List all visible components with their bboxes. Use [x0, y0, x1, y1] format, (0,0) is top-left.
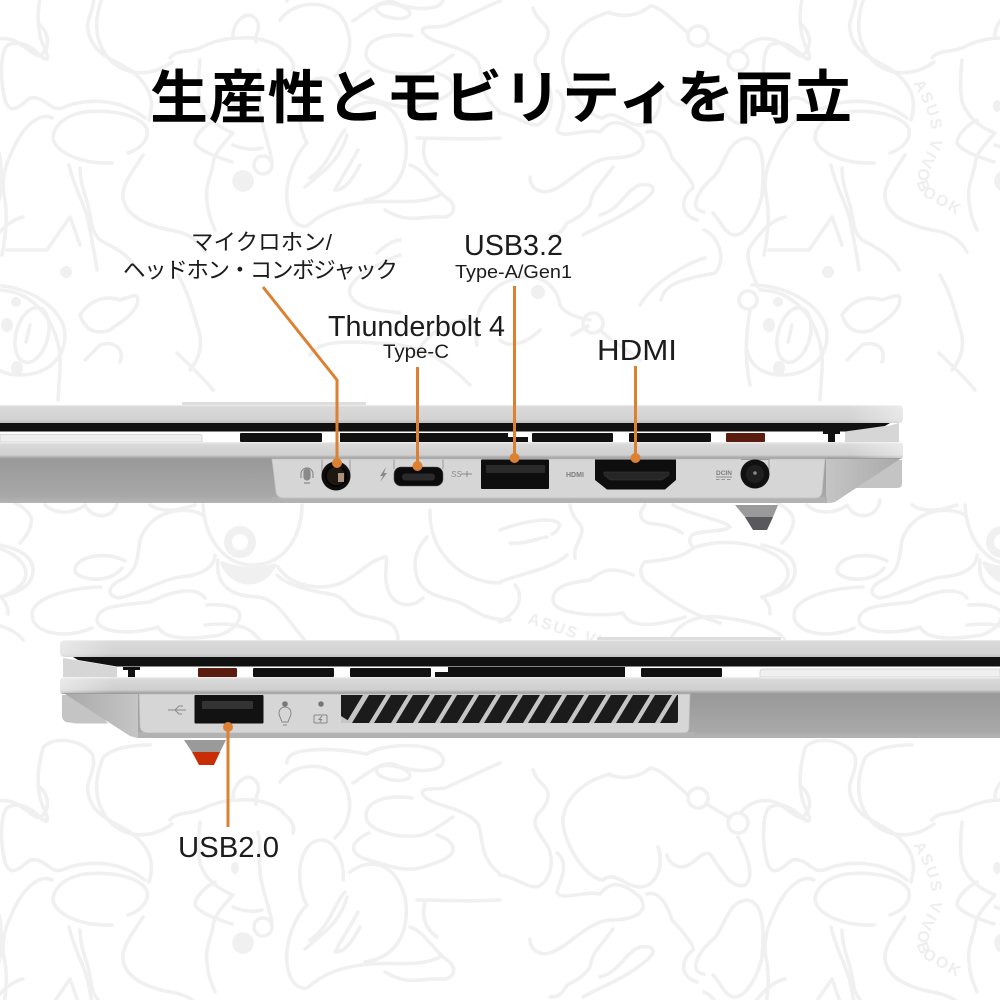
- base top edge: [0, 442, 903, 459]
- side wedge: [65, 694, 140, 738]
- icon: power LED and bulb: [279, 701, 291, 725]
- lid edge tab: [597, 637, 781, 641]
- label: USB3.2: Type-A/Gen1: [455, 261, 572, 282]
- HDMI port: [595, 460, 676, 490]
- keyboard keys in gap: [123, 667, 722, 677]
- port panel: [272, 459, 825, 498]
- lid edge tab: [182, 402, 366, 406]
- icon: SS USB: SS: [451, 470, 462, 479]
- cooling vent: [341, 695, 678, 723]
- label: microphone / headphone combo jack: マイクロホン/: [191, 230, 333, 255]
- label: USB3.2: USB3.2: [464, 230, 563, 262]
- title: 生産性とモビリティを両立: [150, 66, 852, 131]
- rubber foot: [735, 505, 778, 530]
- hinge wedge: [63, 658, 117, 677]
- icon: USB symbol: [168, 706, 186, 714]
- underside grey: [0, 459, 826, 503]
- leader: USB3.2: [510, 286, 520, 463]
- touchpad sliver: [0, 434, 202, 442]
- icon: battery LED: [314, 701, 327, 723]
- underside grey: [138, 694, 1000, 738]
- keyboard gap: [73, 657, 1000, 666]
- laptop: upper view, left-side ports: [0, 402, 903, 530]
- label: USB2.0: USB2.0: [178, 832, 279, 864]
- label: microphone / headphone combo jack: ヘッドホン・コンボジャック: [123, 258, 398, 283]
- USB-C port: [394, 460, 443, 486]
- label: microphone / headphone combo jack: [123, 230, 398, 283]
- leader: HDMI: [630, 366, 640, 463]
- background wordmarks: ASUS VIVOBOOK: ASUS VIVOBOOK: [914, 82, 962, 214]
- rear foot wedge: [62, 695, 108, 724]
- base top edge: [60, 677, 1000, 694]
- lid: [60, 640, 1000, 657]
- combo jack port: [322, 460, 350, 490]
- leader: Thunderbolt 4: [412, 367, 422, 471]
- touchpad sliver: [760, 669, 1000, 677]
- lid: [0, 405, 903, 423]
- hinge wedge: [845, 423, 899, 442]
- background wordmarks: ASUS VIVOBOOK: ASUS VIVOBOOK: [914, 844, 962, 976]
- rear foot wedge: [853, 460, 902, 488]
- icon: thunderbolt: [380, 467, 387, 482]
- rubber foot: [184, 740, 226, 765]
- keyboard keys in gap: [240, 431, 840, 442]
- leader: USB2.0: [223, 722, 233, 827]
- icon: microphone headset: [301, 468, 313, 483]
- DC-IN label: DCIN: [716, 470, 732, 477]
- label: Thunderbolt 4: Thunderbolt 4: [328, 311, 505, 343]
- USB-A 2.0 port: [194, 695, 264, 724]
- background wordmarks: ASUS VIVOBOOK: ASUS VIVO: [526, 611, 631, 659]
- label: Thunderbolt 4: Type-C: [383, 342, 449, 363]
- port panel: [139, 694, 690, 733]
- laptop: lower view, right-side ports: [60, 637, 1000, 765]
- keyboard gap: [0, 423, 890, 432]
- label: USB3.2: [455, 230, 572, 282]
- label: HDMI: HDMI: [597, 335, 677, 367]
- background wordmarks: ASUS VIVOBOOK: [490, 82, 962, 976]
- icon: SS USB: [451, 470, 472, 479]
- DC-in jack: [740, 460, 770, 488]
- USB-A 3.2 port: [481, 460, 549, 489]
- side wedge: [822, 459, 900, 503]
- leader: microphone jack: [263, 287, 342, 468]
- label: Thunderbolt 4: [328, 311, 505, 363]
- HDMI label: HDMI: [566, 472, 584, 479]
